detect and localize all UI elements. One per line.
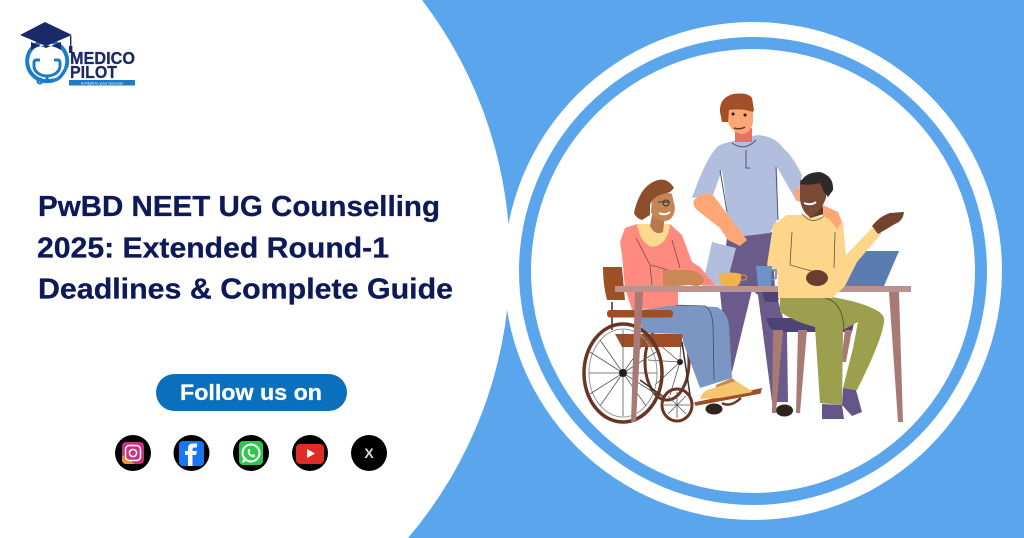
logo: Medico Pilot: PILOT [70, 62, 117, 82]
icon: stethoscope ring [27, 41, 67, 84]
standing man's head [720, 94, 754, 142]
seated man's head [800, 172, 833, 218]
mug: orange [719, 272, 746, 286]
wheelchair second wheel [645, 324, 689, 400]
seated man's chair [762, 292, 855, 413]
laptop [838, 251, 899, 286]
woman's trouser seam [673, 305, 714, 380]
shirt details [720, 140, 778, 220]
table [615, 286, 911, 422]
title: Deadlines & Complete Guide [38, 274, 453, 306]
woman's head [634, 180, 675, 233]
seated man's trouser seam [825, 298, 844, 330]
circular ring frame [504, 22, 1002, 520]
icon: facebook [174, 435, 210, 471]
icon: instagram [115, 435, 151, 471]
follow us button: Follow us on [180, 380, 322, 405]
woman's hand [663, 270, 704, 287]
illustration: three people at a table [584, 94, 911, 422]
social icons [115, 435, 387, 471]
logo tagline bar: A Flight to your Success [81, 80, 123, 86]
seated man's shoes [822, 388, 862, 419]
icon: X: X [364, 445, 374, 461]
logo wordmark: MEDICO [70, 48, 135, 68]
standing man's shirt [692, 135, 802, 238]
title [37, 191, 453, 306]
wheelchair seat [615, 334, 682, 347]
wheelchair back [603, 267, 625, 330]
hand on seated man's shoulder [823, 205, 842, 229]
woman's collar [637, 224, 670, 247]
standing man's shoes [706, 404, 793, 416]
seated man's trousers [780, 297, 884, 405]
left white panel [0, 0, 510, 538]
seated man's hand gesture [872, 212, 904, 234]
wheelchair armrest [607, 310, 673, 318]
icon: graduation cap [20, 22, 72, 53]
standing man's hidden forearm [794, 188, 800, 202]
icon: X [351, 435, 387, 471]
title: 2025: Extended Round-1 [37, 232, 389, 264]
seated man's sweater [767, 215, 882, 298]
paper sheet [702, 242, 736, 290]
title: PwBD NEET UG Counselling [38, 191, 440, 223]
icon: whatsapp [233, 435, 269, 471]
icon: youtube [292, 435, 328, 471]
wheelchair large wheel [584, 324, 662, 422]
woman's sweater [620, 224, 715, 310]
seated man's hand on table [806, 270, 828, 286]
mug: blue [756, 266, 776, 286]
woman's sweater seams [636, 238, 680, 285]
wheelchair caster wheel [640, 342, 741, 421]
logo: Medico Pilot [20, 22, 135, 86]
follow us button [156, 374, 347, 411]
standing man's trousers [720, 232, 788, 402]
woman's shoes [700, 378, 753, 399]
seated man's sweater seams [790, 214, 835, 272]
wheelchair footrest [695, 389, 761, 405]
woman's trousers [640, 305, 732, 388]
standing man's arm [693, 193, 747, 246]
